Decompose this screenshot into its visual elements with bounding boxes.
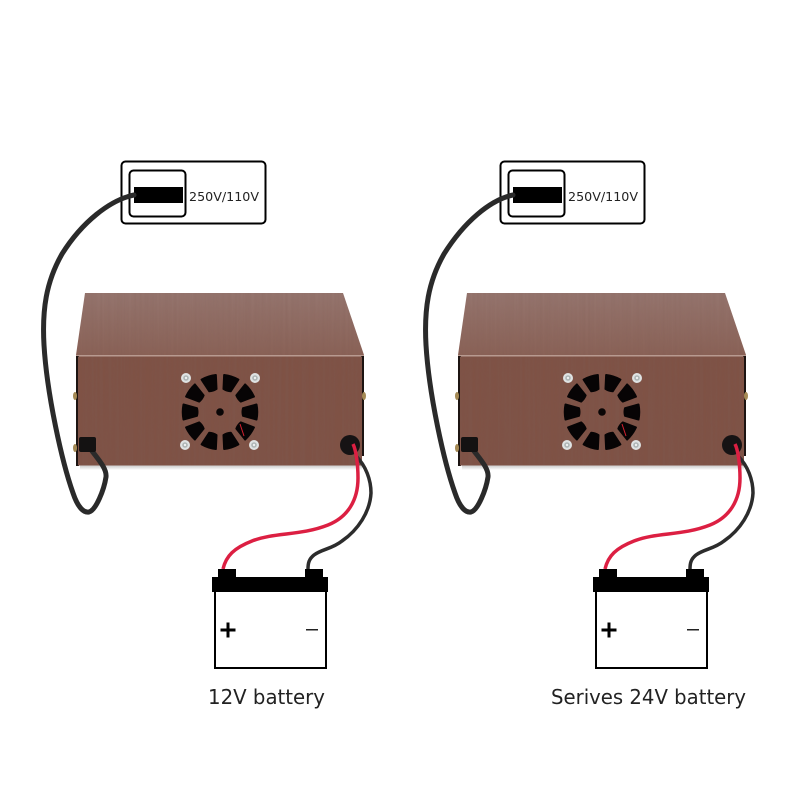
right cord plug <box>461 437 478 452</box>
right battery label: Serives 24V battery <box>551 685 746 709</box>
right black wire <box>690 456 753 569</box>
right battery <box>593 569 709 668</box>
left mains socket: 250V/110V <box>189 190 260 204</box>
left cooling fan <box>180 373 260 450</box>
panel: right 24V setup <box>426 162 753 709</box>
left mains cord <box>44 195 134 512</box>
right mains cord <box>426 195 513 512</box>
right red wire <box>605 444 740 569</box>
right cable gland <box>722 435 742 455</box>
right inverter body <box>455 293 748 470</box>
right mains socket: 250V/110V <box>568 190 639 204</box>
panel: left 12V setup <box>44 162 371 709</box>
left battery label: 12V battery <box>208 685 325 709</box>
left black wire <box>308 456 371 569</box>
left mains socket <box>122 162 266 224</box>
left red wire <box>223 444 358 569</box>
left cord plug <box>79 437 96 452</box>
left battery <box>212 569 328 668</box>
right mains socket <box>500 162 644 224</box>
right cooling fan <box>562 373 642 450</box>
left cable gland <box>340 435 360 455</box>
left inverter body <box>73 293 366 470</box>
